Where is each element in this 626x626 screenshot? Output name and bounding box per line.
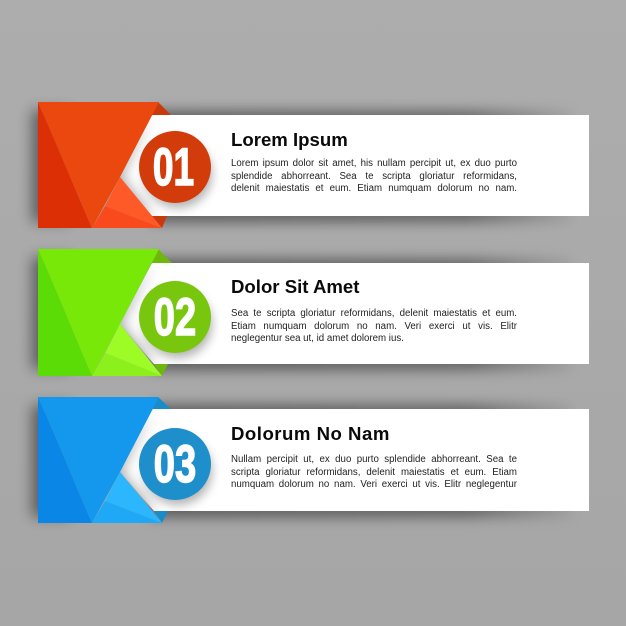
text block: step 02: Etiam numquam dolorum no nam. Veri exerci ut vis. Elitr [231, 321, 517, 332]
orange bottom fold [152, 216, 167, 228]
notch shadow [120, 417, 157, 511]
heading: Dolorum No Nam: Dolorum No Nam [231, 423, 390, 444]
white banner [120, 115, 589, 216]
orange top fold [150, 102, 171, 115]
number badge 03: 03 [154, 434, 196, 493]
text block: step 02: neglegentur sea ut, id amet dolorem ius. [231, 333, 404, 344]
number badge 02: 02 [154, 287, 196, 346]
number badge 03 [139, 428, 212, 505]
orange facets [38, 102, 162, 228]
green facets [38, 249, 162, 376]
banner shadow [150, 404, 572, 518]
white banner [120, 263, 589, 364]
green bottom fold [154, 364, 168, 376]
square shadow [32, 110, 70, 222]
number badge 01 [139, 131, 212, 208]
heading: Lorem Ipsum: Lorem Ipsum [231, 129, 348, 150]
number badge 01: 01 [153, 137, 194, 197]
white banner [120, 409, 589, 511]
text block: step 03: numquam dolorum no nam. Veri exerci ut vis. Elitr neglegentur [231, 479, 517, 490]
infographic shapes [23, 102, 589, 526]
text block: step 03: Nullam percipit ut, ex duo purto splendide abhorreant. Sea te [231, 454, 517, 465]
text block: step 03 [231, 454, 517, 490]
text block: step 01: delenit maiestatis et eum. Etiam numquam dolorum no nam. [231, 183, 517, 194]
square shadow [32, 257, 70, 369]
blue top fold [150, 397, 171, 409]
text block: step 01: splendide abhorreant. Sea te scripta gloriatur reformidans, [231, 171, 517, 182]
blue bottom fold [154, 511, 168, 523]
green top fold [150, 249, 172, 263]
panel: step 01 [32, 102, 589, 228]
number badge 02 [139, 281, 212, 358]
text block: step 02: Sea te scripta gloriatur reformidans, delenit maiestatis et eum. [231, 308, 517, 319]
square shadow [32, 405, 70, 517]
heading: Dolor Sit Amet: Dolor Sit Amet [231, 276, 359, 297]
text block: step 01: Lorem ipsum dolor sit amet, his nullam percipit ut, ex duo purto [231, 158, 517, 169]
text block: step 01 [231, 158, 517, 194]
panel: step 03 [32, 397, 589, 523]
notch shadow [120, 271, 157, 364]
panel: step 02 [32, 249, 589, 376]
text block: step 02 [231, 308, 517, 344]
banner shadow [150, 110, 572, 223]
banner shadow [150, 258, 572, 371]
notch shadow [120, 124, 155, 216]
blue facets [38, 397, 162, 523]
text block: step 03: scripta gloriatur reformidans, delenit maiestatis et eum. Etiam [231, 467, 517, 478]
